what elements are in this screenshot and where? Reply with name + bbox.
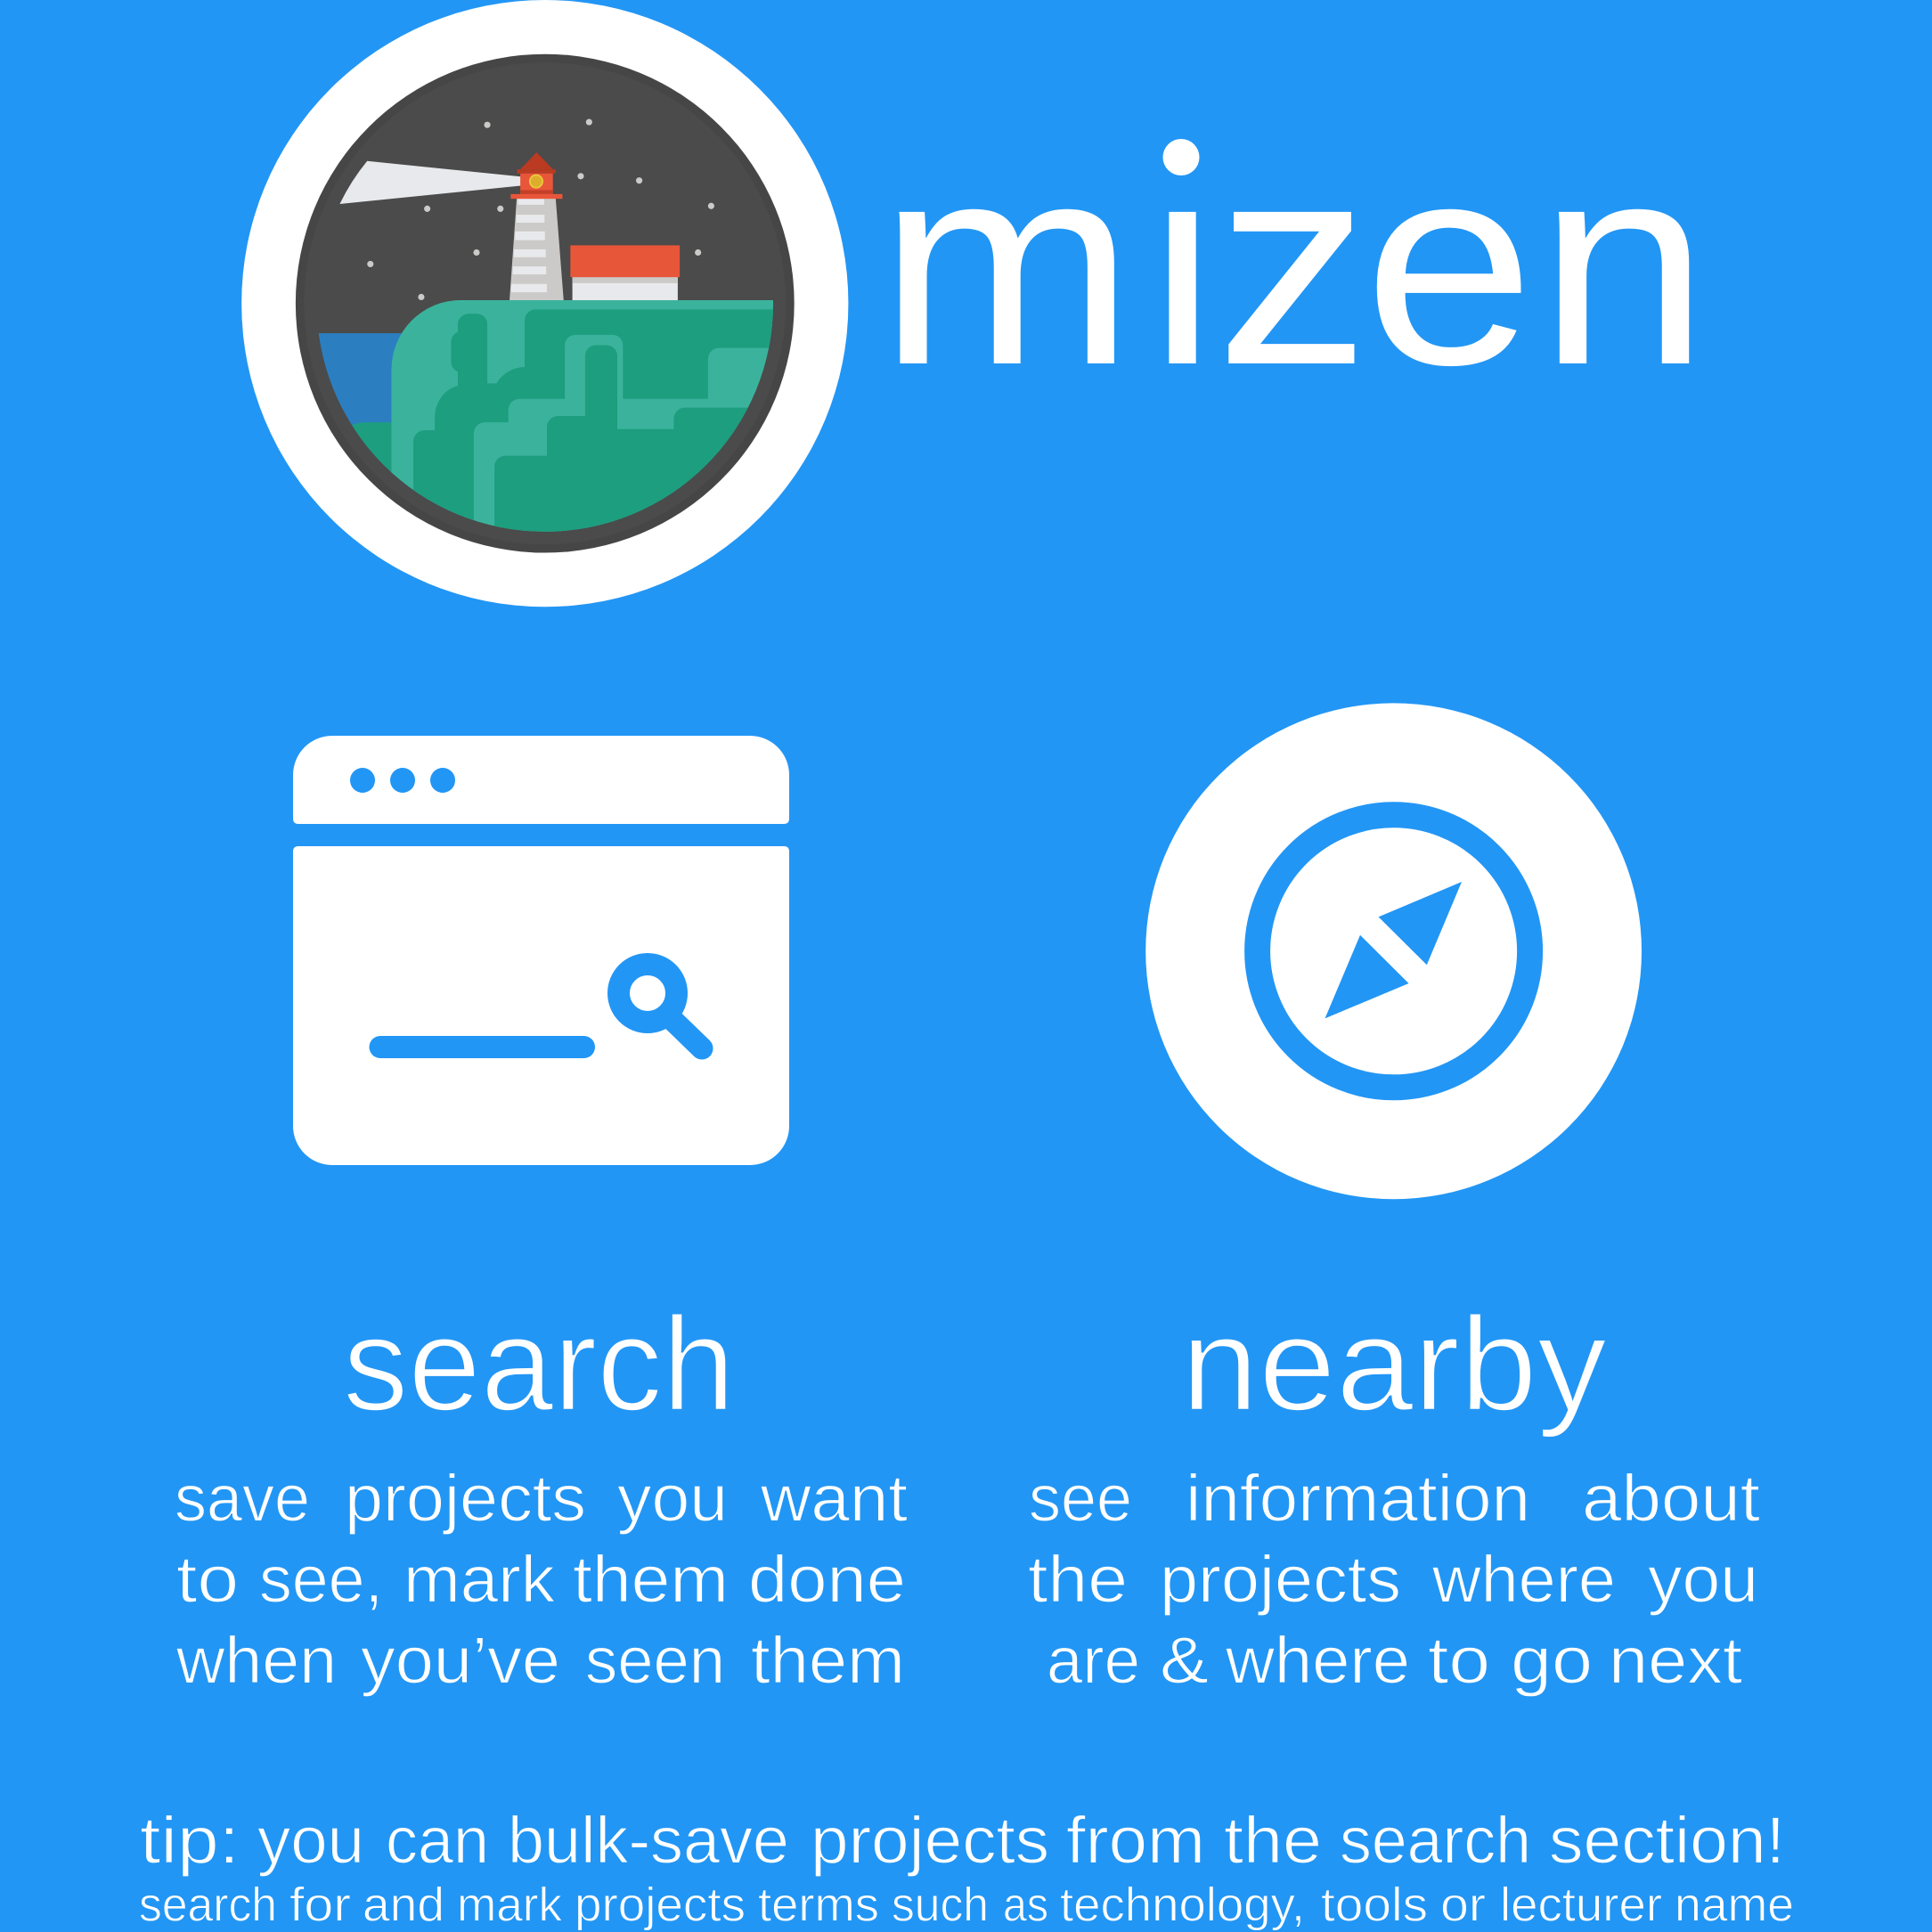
tip headline <box>140 1803 1785 1878</box>
text block: nearby description: next <box>1609 1623 1742 1698</box>
text block: search description: when <box>175 1623 337 1698</box>
title: mizen: mizen <box>879 103 1709 425</box>
text block: search description: mark <box>404 1543 556 1616</box>
text block: search description: want <box>760 1461 908 1536</box>
window dots <box>350 768 455 793</box>
text block: search description: them <box>751 1623 905 1698</box>
text block: search description: to <box>176 1543 239 1616</box>
icon: browser window with search <box>293 736 789 1165</box>
tip detail text: for <box>289 1878 351 1931</box>
lighthouse <box>509 152 564 300</box>
tip detail text: lecturer <box>1500 1878 1662 1931</box>
stars <box>367 118 714 300</box>
logo: lighthouse badge <box>241 0 848 607</box>
browser body <box>293 846 789 1165</box>
text block: nearby description: & <box>1160 1623 1209 1698</box>
tip headline: you <box>257 1803 364 1878</box>
text block: nearby description <box>1028 1461 1760 1698</box>
tip detail text: and <box>363 1878 444 1931</box>
text block: search description: seen <box>585 1623 725 1698</box>
tip detail text: terms <box>758 1878 879 1931</box>
text block: search description: done <box>748 1543 906 1616</box>
sea and cliff <box>319 300 773 532</box>
text block: nearby description: to <box>1428 1623 1490 1698</box>
tip detail text <box>139 1878 1794 1931</box>
tip headline: search <box>1340 1803 1531 1878</box>
tip headline: from <box>1066 1803 1205 1878</box>
tip detail text: search <box>139 1878 277 1931</box>
tip detail text: name <box>1675 1878 1794 1931</box>
tip detail text: tools <box>1321 1878 1428 1931</box>
tip headline: bulk-save <box>508 1803 789 1878</box>
tip detail text: as <box>1003 1878 1048 1931</box>
tip detail text: projects <box>575 1878 746 1931</box>
browser title bar <box>293 736 789 824</box>
magnifier <box>618 964 702 1048</box>
icon: compass <box>1145 703 1642 1199</box>
text block: search description: see, <box>259 1543 383 1616</box>
text block: nearby description: where <box>1225 1623 1410 1698</box>
text block: search description: them <box>573 1543 729 1616</box>
light beam <box>339 161 521 204</box>
tip headline: tip: <box>140 1803 240 1878</box>
text block: nearby description: the <box>1028 1543 1128 1616</box>
text block: search description <box>175 1461 908 1698</box>
text block: nearby description: you <box>1648 1543 1758 1616</box>
text block: nearby description: about <box>1582 1461 1760 1536</box>
tip detail text: such <box>892 1878 989 1931</box>
dark night sky circle <box>296 54 795 553</box>
heading: nearby: nearby <box>1181 1289 1607 1439</box>
text block: nearby description: see <box>1029 1461 1132 1536</box>
text block: search description: save <box>175 1461 310 1536</box>
tip detail text: technology, <box>1060 1878 1305 1931</box>
tip headline: the <box>1224 1803 1322 1878</box>
text block: nearby description: where <box>1431 1543 1616 1616</box>
text block: search description: projects <box>345 1461 586 1536</box>
red-roofed house <box>570 245 680 300</box>
tip headline: can <box>386 1803 489 1878</box>
white badge circle <box>241 0 848 607</box>
tip detail text: or <box>1440 1878 1486 1931</box>
text block: nearby description: projects <box>1160 1543 1401 1616</box>
search bar line <box>369 1036 595 1058</box>
tip headline: section! <box>1549 1803 1785 1878</box>
heading: search: search <box>343 1289 735 1439</box>
text block: nearby description: information <box>1186 1461 1530 1536</box>
text block: search description: you <box>617 1461 728 1536</box>
tip headline: projects <box>811 1803 1049 1878</box>
text block: nearby description: are <box>1047 1623 1140 1698</box>
text block: search description: you’ve <box>361 1623 560 1698</box>
tip detail text: mark <box>457 1878 563 1931</box>
text block: nearby description: go <box>1511 1623 1593 1698</box>
